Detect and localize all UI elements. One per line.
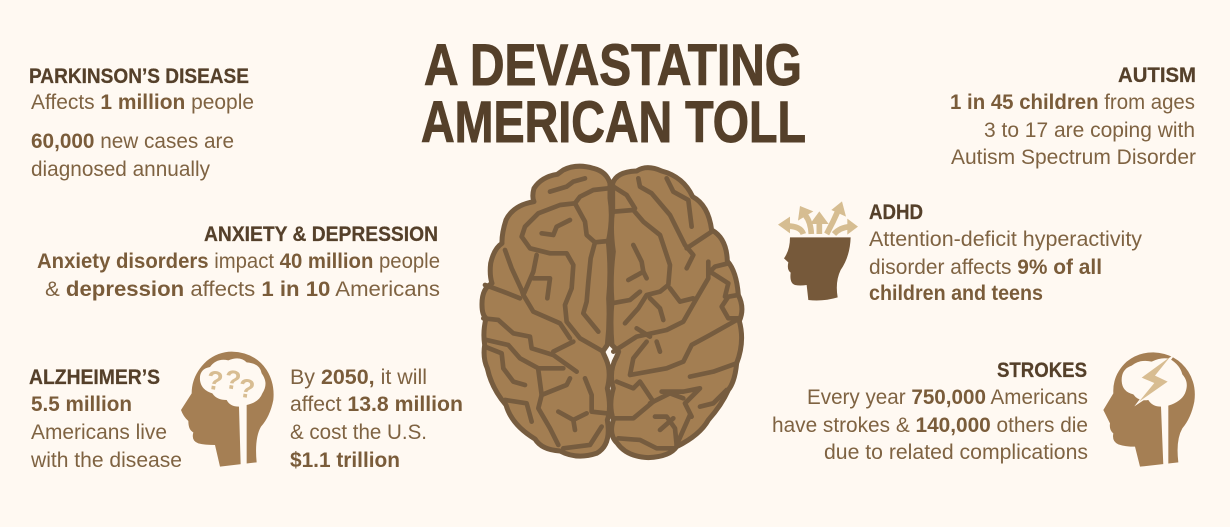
panel: anxiety and depression <box>37 223 440 301</box>
panel: Parkinson's disease <box>29 65 254 181</box>
panel: Alzheimer's projection: & cost the U.S. <box>290 420 427 444</box>
panel: strokes: have strokes & 140,000 others die <box>772 413 1088 437</box>
icon: head with question marks <box>181 352 274 467</box>
panel: Alzheimer's projection: By 2050, it will <box>290 365 427 389</box>
panel: ADHD: ADHD <box>869 201 923 224</box>
icon: head with question marks: ? <box>223 364 243 396</box>
panel: Alzheimer's projection: affect 13.8 million <box>290 392 463 416</box>
panel: strokes: due to related complications <box>824 440 1088 464</box>
panel: Alzheimer's text: ALZHEIMER’S <box>29 366 160 389</box>
panel: ADHD: Attention-deficit hyperactivity <box>869 227 1142 251</box>
panel: Parkinson's disease: 60,000 new cases are <box>31 129 234 153</box>
panel: autism <box>950 64 1196 169</box>
icon: head with arrows <box>778 201 858 300</box>
right sulci <box>612 178 738 448</box>
panel: Alzheimer's text <box>29 366 182 472</box>
panel: anxiety and depression: & depression affects 1 in 10 Americans <box>45 277 440 301</box>
panel: Parkinson's disease: diagnosed annually <box>31 157 210 181</box>
left sulci <box>483 178 608 448</box>
panel: autism: AUTISM <box>1118 64 1196 87</box>
icon: head with question marks: ? <box>237 373 257 405</box>
icon: brain <box>482 166 742 458</box>
panel: Alzheimer's text: Americans live <box>31 420 167 444</box>
right hemisphere <box>611 168 742 458</box>
panel: autism: Autism Spectrum Disorder <box>951 145 1196 169</box>
panel: Alzheimer's text: with the disease <box>30 448 182 472</box>
panel: strokes <box>772 359 1088 464</box>
icon: head with question marks: ? <box>205 365 225 397</box>
panel: anxiety and depression: Anxiety disorders impact 40 million people <box>37 249 440 273</box>
left hemisphere <box>482 166 611 456</box>
panel: ADHD <box>869 201 1142 305</box>
title: AMERICAN TOLL <box>421 90 806 155</box>
panel: Parkinson's disease: PARKINSON’S DISEASE <box>29 65 249 88</box>
icon: head with lightning bolt <box>1103 352 1195 467</box>
panel: strokes: STROKES <box>997 359 1087 382</box>
panel: Alzheimer's text: 5.5 million <box>31 392 132 416</box>
panel: ADHD: children and teens <box>869 281 1043 305</box>
panel: Alzheimer's projection <box>290 365 463 472</box>
title <box>421 33 806 155</box>
panel: autism: 3 to 17 are coping with <box>984 118 1195 142</box>
panel: ADHD: disorder affects 9% of all <box>869 255 1102 279</box>
panel: strokes: Every year 750,000 Americans <box>807 385 1088 409</box>
panel: anxiety and depression: ANXIETY & DEPRESSION <box>204 223 438 246</box>
panel: Alzheimer's projection: $1.1 trillion <box>290 448 400 472</box>
panel: autism: 1 in 45 children from ages <box>950 90 1195 114</box>
title: A DEVASTATING <box>424 33 802 98</box>
panel: Parkinson's disease: Affects 1 million people <box>31 90 254 114</box>
